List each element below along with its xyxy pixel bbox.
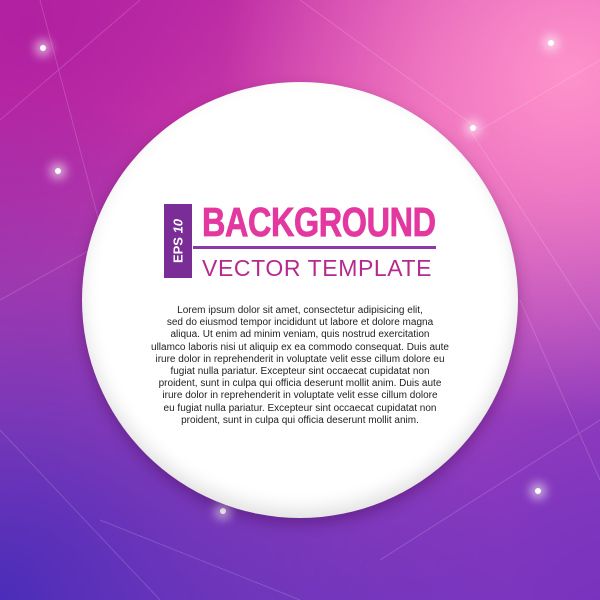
body text: ullamco laboris nisi ut aliquip ex ea commodo consequat. Duis aute [151, 342, 449, 353]
body text: Lorem ipsum dolor sit amet, consectetur adipisicing elit, [177, 305, 423, 316]
body text: sed do eiusmod tempor incididunt ut labore et dolore magna [167, 317, 433, 328]
body text: eu fugiat nulla pariatur. Excepteur sint occaecat cupidatat non [164, 403, 436, 414]
body text: proident, sunt in culpa qui officia deserunt mollit anim. Duis aute [159, 378, 441, 389]
body text [151, 305, 449, 426]
heading block [164, 199, 436, 281]
body text: aliqua. Ut enim ad minim veniam, quis nostrud exercitation [170, 329, 430, 340]
EPS 10 tab [164, 204, 192, 278]
divider line [193, 246, 436, 249]
EPS 10 tab: EPS 10 [170, 219, 186, 263]
body text: irure dolor in reprehenderit in voluptate velit esse cillum dolore eu [155, 354, 445, 365]
title BACKGROUND: BACKGROUND [202, 199, 436, 245]
body text: irure dolor in reprehenderit in voluptate velit esse cillum dolore [162, 390, 438, 401]
subtitle: VECTOR TEMPLATE [202, 255, 432, 281]
body text: proident, sunt in culpa qui officia deserunt mollit anim. [181, 415, 419, 426]
body text: fugiat nulla pariatur. Excepteur sint occaecat cupidatat non [170, 366, 430, 377]
sparkle lights [29, 30, 564, 525]
white circle panel [82, 82, 518, 518]
